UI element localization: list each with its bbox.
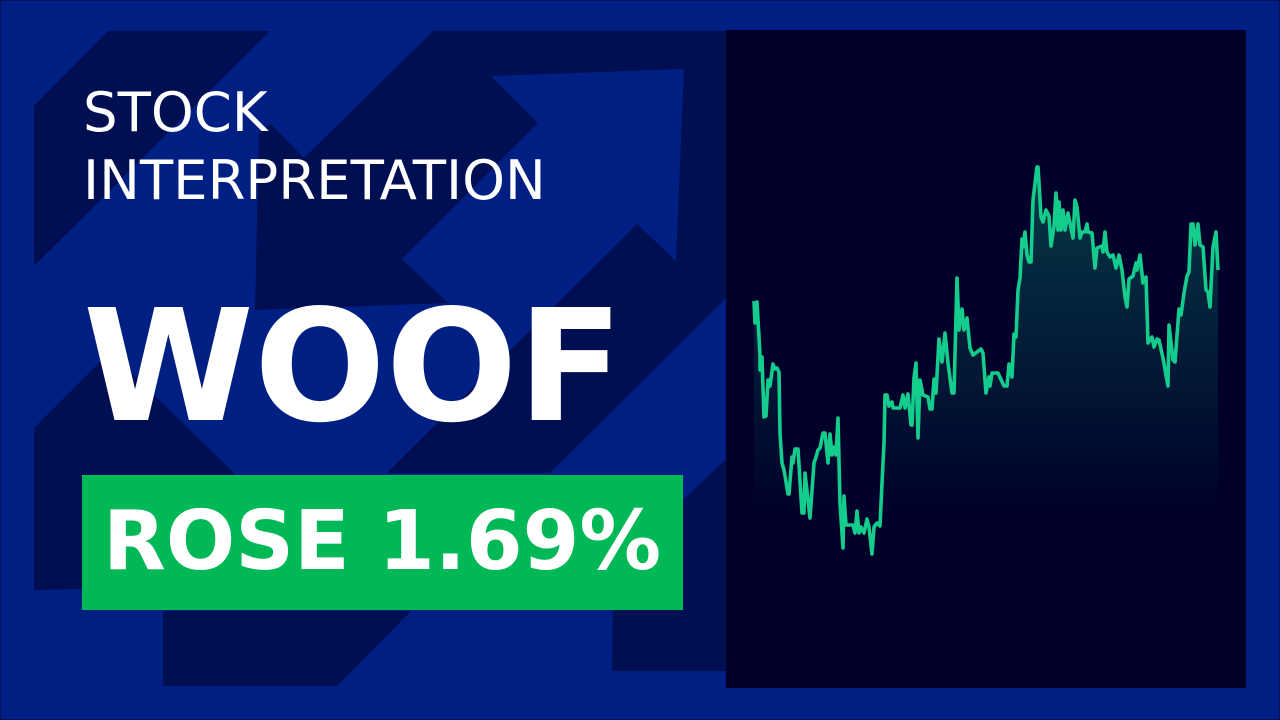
callout: price change [82, 475, 683, 610]
line chart [752, 165, 1220, 556]
callout text: ROSE 1.69% [103, 494, 661, 589]
heading: interpretation: INTERPRETATION [83, 148, 546, 212]
ticker symbol: WOOF [83, 276, 623, 457]
heading: stock: STOCK [83, 80, 268, 144]
chart price line [754, 167, 1218, 554]
chart area fill [754, 167, 1218, 560]
panel: chart background [726, 30, 1246, 688]
